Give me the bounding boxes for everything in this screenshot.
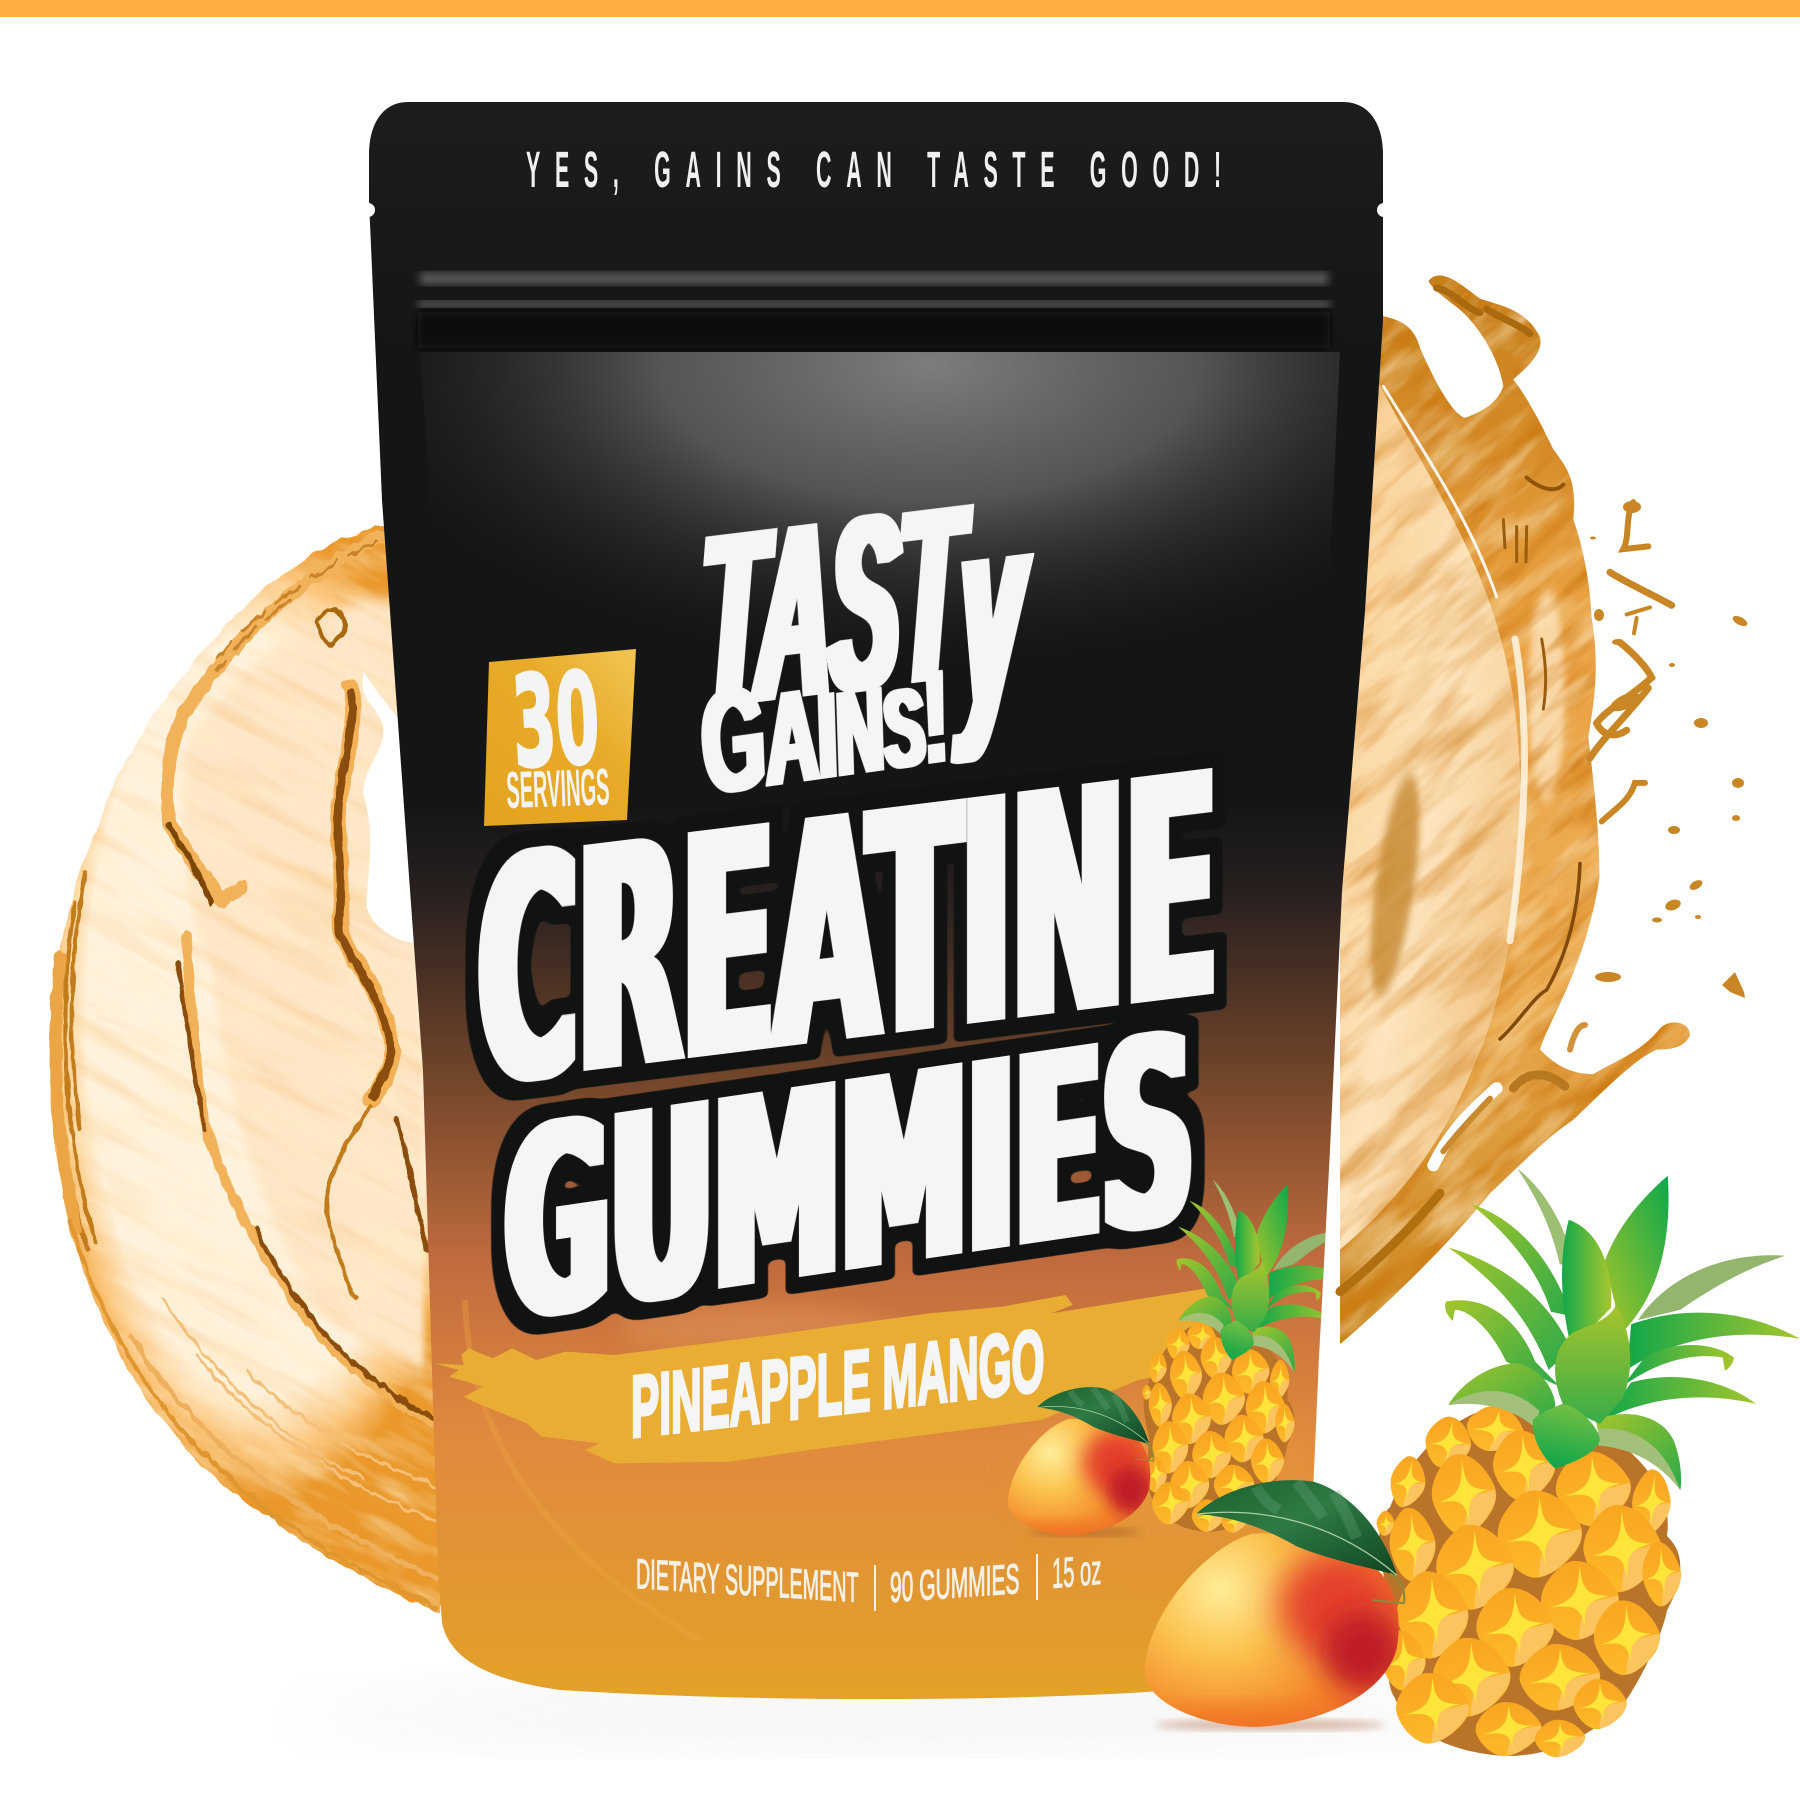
liquid splash: left — [48, 525, 441, 1614]
big mango — [1145, 1480, 1404, 1735]
logo word Tasty: y — [956, 453, 1029, 766]
info divider 2 — [1036, 1554, 1038, 1600]
flavor name: PINEAPPLE MANGO — [631, 1311, 1044, 1456]
servings badge — [484, 646, 636, 826]
logo: Tasty Gains — [690, 446, 1029, 825]
title: Creatine Gummies — [478, 707, 1217, 1382]
small mango shadow — [1030, 1527, 1140, 1537]
pouch body — [369, 102, 1383, 1699]
badge number: 30 — [509, 646, 603, 796]
tagline: YES, GAINS CAN TASTE GOOD! — [526, 143, 1221, 199]
small mango on pouch — [1008, 1387, 1153, 1540]
info: 90 gummies: 90 GUMMIES — [890, 1556, 1020, 1612]
product pouch — [361, 102, 1391, 1699]
title word Creatine: CREATINE — [478, 707, 1217, 1158]
big mango shadow — [1155, 1719, 1385, 1731]
title outline word 2: GUMMIES — [505, 976, 1194, 1382]
badge background — [484, 649, 636, 826]
liquid droplets and spatter — [1590, 501, 1749, 998]
info: 15 oz: 15 oz — [1052, 1545, 1101, 1597]
brush stroke — [435, 1288, 1245, 1463]
notch right — [1377, 203, 1391, 217]
small pineapple on pouch — [1142, 1180, 1326, 1532]
top orange bar — [0, 0, 1800, 17]
info divider 1 — [874, 1565, 876, 1611]
notch left — [361, 203, 375, 217]
logo word Tasty: TAST — [702, 454, 961, 762]
logo word Gains: GAINS! — [690, 630, 957, 825]
title word Gummies: GUMMIES — [505, 976, 1194, 1382]
badge label: SERVINGS — [505, 758, 610, 820]
info: dietary supplement: DIETARY SUPPLEMENT — [636, 1550, 859, 1611]
floor shadow — [300, 1695, 1500, 1735]
liquid splash: right — [1336, 275, 1690, 1344]
big pineapple — [1377, 1169, 1800, 1759]
title outline word 1: CREATINE — [478, 707, 1217, 1158]
pouch shading — [418, 272, 1340, 1640]
